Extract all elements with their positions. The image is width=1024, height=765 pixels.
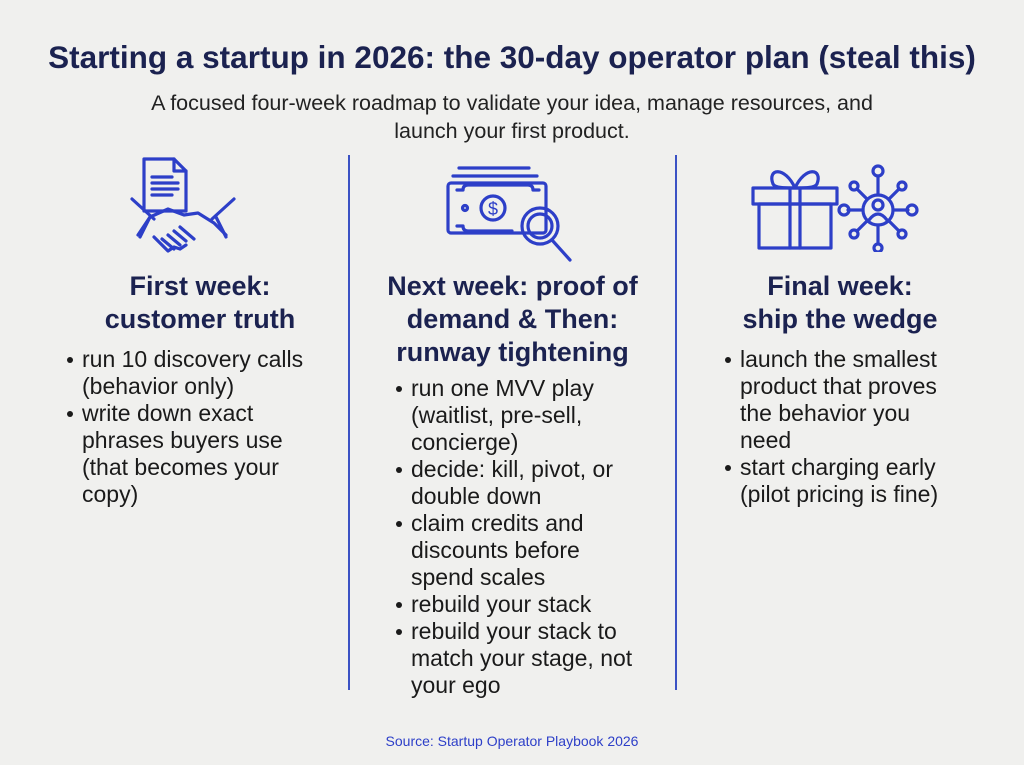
heading: first week: First week: [129,271,271,301]
heading: final week [742,271,938,334]
bullets: next week [396,375,632,698]
heading: first week [105,271,295,334]
bullets: next week: rebuild your stack [411,591,591,617]
heading: final week: Final week: [767,271,913,301]
divider left [348,155,350,690]
bullets: next week: claim credits and discounts before spend scales [411,510,584,590]
source: Source: Startup Operator Playbook 2026 [386,733,638,749]
bullets: next week: rebuild your stack to match your stage, not your ego [411,618,632,698]
bullets: final week: start charging early (pilot pricing is fine) [740,454,938,507]
heading: next week: Next week: proof of demand & Then: runway tightening [387,271,638,367]
icon: money with magnifier: $ [488,199,498,219]
subtitle: A focused four-week roadmap to validate your idea, manage resources, and launch your first product. [151,91,873,143]
bullets: next week: run one MVV play (waitlist, pre-sell, concierge) [411,375,594,455]
heading: first week: customer truth [105,304,295,334]
icon: money with magnifier [446,166,572,262]
bullets: first week: write down exact phrases buyers use (that becomes your copy) [82,400,283,507]
heading: final week: ship the wedge [742,304,938,334]
title: Starting a startup in 2026: the 30-day operator plan (steal this) [48,39,976,75]
bullets: final week [725,346,938,507]
bullets: first week: run 10 discovery calls (behavior only) [82,346,303,399]
bullets: first week [67,346,303,507]
icon: gift and network [751,164,919,252]
divider right [675,155,677,690]
icon: handshake with document [130,157,236,253]
bullets: next week: decide: kill, pivot, or double down [411,456,613,509]
bullets: final week: launch the smallest product that proves the behavior you need [740,346,937,453]
